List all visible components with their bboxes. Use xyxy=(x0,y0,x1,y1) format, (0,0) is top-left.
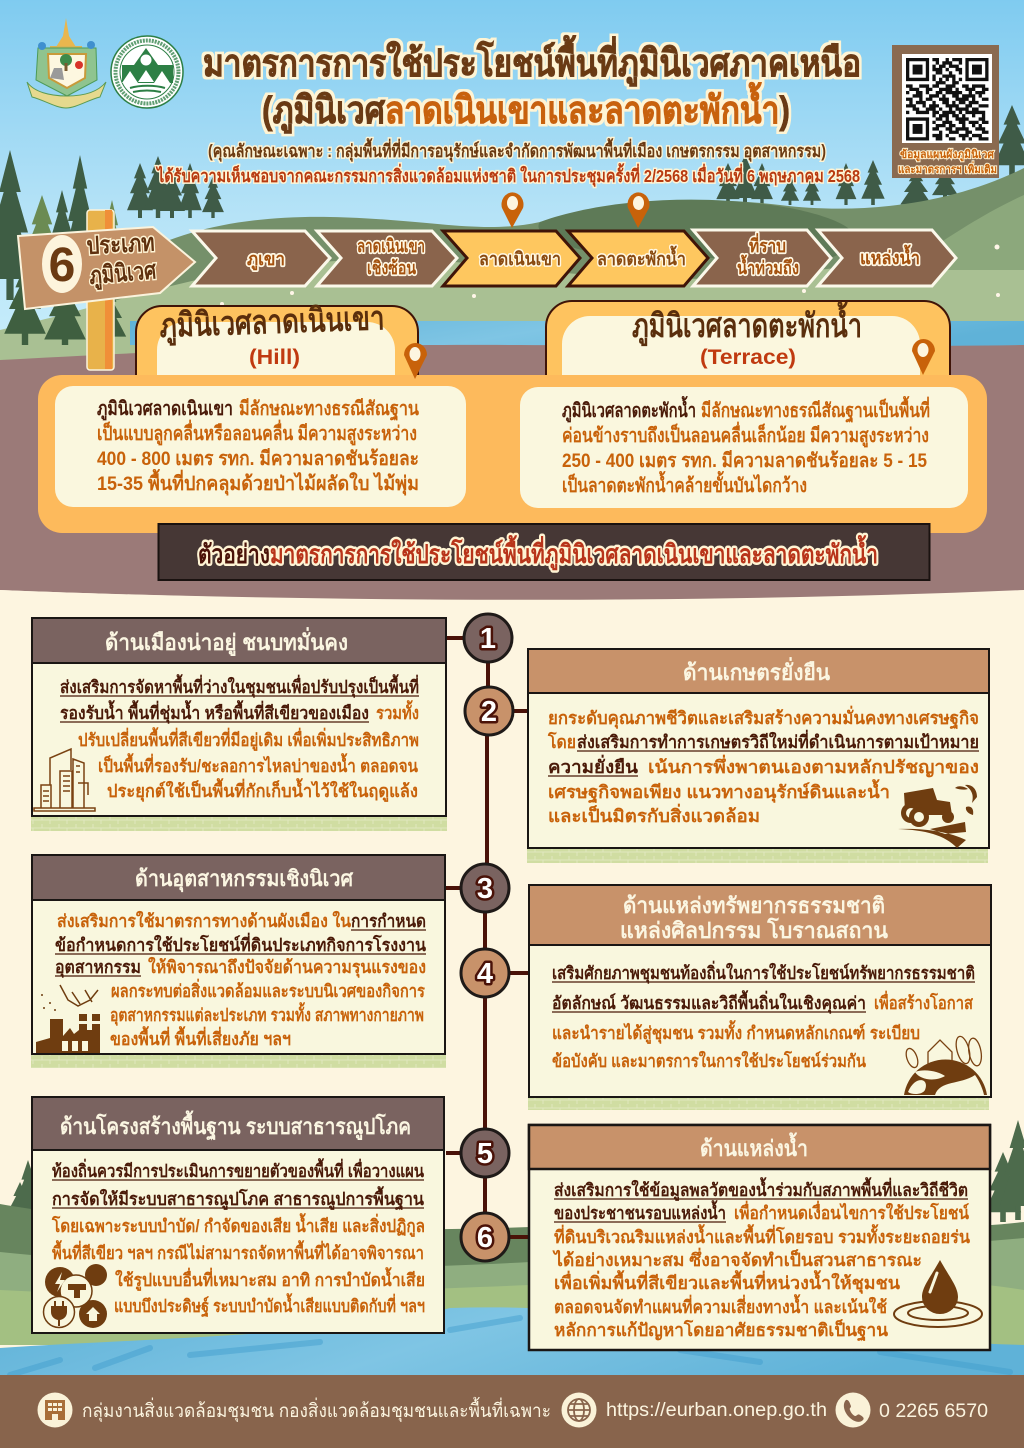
sign text xyxy=(86,229,158,291)
background: mauve band xyxy=(0,345,1024,602)
card: hill description: เป็นแบบลูกคลื่นหรือลอนคลื่น มีความสูงระหว่าง xyxy=(97,419,417,447)
logo: provincial seal xyxy=(27,18,106,108)
body text 6: หลักการแก้ปัญหาโดยอาศัยธรรมชาติเป็นฐาน xyxy=(554,1318,888,1342)
number 1 xyxy=(464,614,512,662)
number 6: 6 xyxy=(477,1222,493,1254)
logo: green round emblem xyxy=(111,36,183,108)
chevron: hill slope highlighted xyxy=(443,231,580,286)
title xyxy=(203,35,861,134)
body text 5: พื้นที่สีเขียว ฯลฯ กรณีไม่สามารถจัดหาพื้นที่ได้อาจพิจารณา xyxy=(52,1240,424,1263)
icon: tractor xyxy=(898,785,977,848)
panel 5: infrastructure and utilities xyxy=(32,1097,444,1333)
icon: building xyxy=(38,1392,72,1428)
body text 6: เพื่อกำหนดเงื่อนไขการใช้ประโยชน์ xyxy=(734,1200,969,1223)
banner: examples heading xyxy=(158,524,930,580)
chevron: flood plain: ที่ราบ xyxy=(749,233,786,256)
body text 4 xyxy=(552,960,975,1071)
timeline spine xyxy=(446,638,528,1237)
background: cream section xyxy=(0,590,1024,1380)
body text 5: โดยเฉพาะระบบบำบัด/ กำจัดของเสีย น้ำเสีย และสิ่งปฏิกูล xyxy=(51,1213,425,1238)
background: sky and upper landscape xyxy=(0,0,1024,362)
body text 3: อุตสาหกรรมแต่ละประเภท รวมทั้ง สภาพทางกายภาพ xyxy=(110,1002,424,1026)
label: Hill: (Hill) xyxy=(249,346,300,369)
body text 3: ส่งเสริมการใช้มาตรการทางด้านผังเมือง ใน xyxy=(57,910,351,931)
number 1: 1 xyxy=(480,623,496,655)
sign number: 6 xyxy=(49,239,75,292)
number 2: 2 xyxy=(481,696,497,728)
header 6: ด้านแหล่งน้ำ xyxy=(700,1132,808,1161)
body text 1: ปรับเปลี่ยนพื้นที่สีเขียวที่มีอยู่เดิม เพื่อเพิ่มประสิทธิภาพ xyxy=(78,727,419,752)
QR code xyxy=(906,60,988,139)
subtitle: characteristics: (คุณลักษณะเฉพาะ : กลุ่มพื้นที่ที่มีการอนุรักษ์และจำกัดการพัฒนาพื้นที่เมือง เกษตรกรรม อุตสาหกรรม) xyxy=(208,138,826,162)
header 5: ด้านโครงสร้างพื้นฐาน ระบบสาธารณูปโภค xyxy=(60,1110,411,1141)
body text 4: เพื่อสร้างโอกาส xyxy=(874,990,973,1013)
panel 1: livable city xyxy=(31,618,447,831)
number 5 xyxy=(461,1129,509,1177)
panel 4: natural and cultural resources xyxy=(528,885,991,1110)
QR panel xyxy=(892,45,999,178)
chevron: terrace highlighted xyxy=(568,231,708,286)
background: lower landscape and water xyxy=(0,1120,1024,1376)
icon: phone xyxy=(836,1392,870,1428)
heading: hill: ภูมินิเวศลาดเนินเขา xyxy=(159,299,385,347)
pin marker: terrace xyxy=(628,192,650,228)
header 4 xyxy=(620,893,888,943)
body text 5: ท้องถิ่นควรมีการประเมินการขยายตัวของพื้นที่ เพื่อวางแผน xyxy=(52,1158,424,1181)
card: terrace description xyxy=(520,387,968,508)
chevron: complex hill slope xyxy=(317,231,457,286)
body text 2: ยกระดับคุณภาพชีวิตและเสริมสร้างความมั่นคงทางเศรษฐกิจ xyxy=(548,705,979,730)
card: terrace description: มีลักษณะทางธรณีสัณฐานเป็นพื้นที่ xyxy=(701,395,930,424)
number 3: 3 xyxy=(477,873,493,905)
card: hill description xyxy=(55,386,466,507)
body text 2: ส่งเสริมการทำการเกษตรวิถีใหม่ที่ดำเนินการตามเป้าหมาย xyxy=(577,729,979,752)
body text 5: ใช้รูปแบบอื่นที่เหมาะสม อาทิ การบำบัดน้ำเสีย xyxy=(115,1267,425,1292)
title line 2: (ภูมินิเวศลาดเนินเขาและลาดตะพักน้ำ) xyxy=(262,82,790,134)
card: hill description: 400 - 800 เมตร รทก. มีความลาดชันร้อยละ xyxy=(97,447,419,470)
body text 4: อัตลักษณ์ วัฒนธรรมและวิถีพื้นถิ่นในเชิงคุณค่า xyxy=(552,990,866,1014)
panel 3: ecological industry xyxy=(31,855,446,1068)
body text 2: และเป็นมิตรกับสิ่งแวดล้อม xyxy=(548,803,760,826)
body text 2: เน้นการพึ่งพาตนเองตามหลักปรัชญาของ xyxy=(648,754,979,778)
card: terrace description: 250 - 400 เมตร รทก. มีความลาดชันร้อยละ 5 - 15 xyxy=(562,449,927,472)
body text 5: แบบบึงประดิษฐ์ ระบบบำบัดน้ำเสียแบบติดกับที่ ฯลฯ xyxy=(114,1293,425,1318)
number 5: 5 xyxy=(477,1138,493,1170)
chevron: complex hill slope: เชิงซ้อน xyxy=(367,258,417,278)
QR caption xyxy=(898,148,997,176)
pin marker: hill panel xyxy=(404,343,427,379)
chevron: water source: แหล่งน้ำ xyxy=(860,244,920,268)
body text 2: เศรษฐกิจพอเพียง แนวทางอนุรักษ์ดินและน้ำ xyxy=(548,779,890,804)
footer: website: https://eurban.onep.go.th xyxy=(606,1400,827,1421)
chevron: mountain: ภูเขา xyxy=(247,249,285,271)
body text 3: การกำหนด xyxy=(351,911,426,931)
chevron: mountain xyxy=(192,231,330,286)
body text 1: รองรับน้ำ พื้นที่ชุ่มน้ำ หรือพื้นที่สีเขียวของเมือง xyxy=(60,700,369,724)
number 6 xyxy=(461,1213,509,1261)
wooden post xyxy=(87,210,114,370)
QR caption: และมาตรการฯ เพิ่มเติม xyxy=(898,161,997,176)
card: hill description: 15-35 พื้นที่ปกคลุมด้วยป่าไม้ผลัดใบ ไม้พุ่ม xyxy=(97,468,419,496)
body text 6: ของประชาชนรอบแหล่งน้ำ xyxy=(554,1200,726,1223)
body text 4: ข้อบังคับ และมาตรการในการใช้ประโยชน์ร่วมกัน xyxy=(552,1050,866,1071)
subtitle: approval: ได้รับความเห็นชอบจากคณะกรรมการสิ่งแวดล้อมแห่งชาติ ในการประชุมครั้งที่ 2/2568 เมื่อวันที่ 6 พฤษภาคม 2568 xyxy=(155,163,860,187)
panel 2: sustainable agriculture xyxy=(527,649,989,863)
number 3 xyxy=(461,864,509,912)
chevron: water source xyxy=(818,230,956,286)
icon: city buildings xyxy=(34,749,95,811)
icon: earth and community xyxy=(904,1035,987,1095)
header 4: ด้านแหล่งทรัพยากรธรรมชาติ xyxy=(623,893,885,918)
header 4: แหล่งศิลปกรรม โบราณสถาน xyxy=(620,917,888,943)
body text 6: ได้อย่างเหมาะสม ซึ่งอาจจัดทำเป็นสวนสาธารณะ xyxy=(552,1247,922,1270)
chevron: flood plain: น้ำท่วมถึง xyxy=(737,254,799,278)
card: hill description: มีลักษณะทางธรณีสัณฐาน xyxy=(239,397,420,422)
body text 1: เป็นพื้นที่รองรับ/ชะลอการไหลบ่าของน้ำ ตลอดจน xyxy=(98,753,418,776)
body text 2: โดย xyxy=(547,731,576,752)
body text 6 xyxy=(552,1177,970,1342)
footer: phone number: 0 2265 6570 xyxy=(879,1401,988,1422)
chevron: terrace highlighted: ลาดตะพักน้ำ xyxy=(597,245,686,269)
sign number xyxy=(42,235,82,293)
sign text: ภูมินิเวศ xyxy=(88,257,158,291)
body text 1: รวมทั้ง xyxy=(376,700,419,723)
card: terrace description: ภูมินิเวศลาดตะพักน้ำ xyxy=(562,395,696,424)
icon: utilities xyxy=(44,1264,107,1328)
body text 3 xyxy=(55,910,426,1049)
number 4: 4 xyxy=(477,958,493,990)
header 2: ด้านเกษตรยั่งยืน xyxy=(683,656,830,685)
body text 5: การจัดให้มีระบบสาธารณูปโภค สาธารณูปการพื้นฐาน xyxy=(52,1186,424,1211)
body text 5 xyxy=(51,1158,425,1318)
header 3: ด้านอุตสาหกรรมเชิงนิเวศ xyxy=(135,866,354,893)
icon: factory xyxy=(36,985,100,1053)
body text 3: ให้พิจารณาถึงปัจจัยด้านความรุนแรงของ xyxy=(148,956,426,978)
footer: organisation: กลุ่มงานสิ่งแวดล้อมชุมชน กองสิ่งแวดล้อมชุมชนและพื้นที่เฉพาะ xyxy=(82,1397,551,1423)
pin marker: hill xyxy=(502,192,524,228)
card: terrace description: ค่อนข้างราบถึงเป็นลอนคลื่นเล็กน้อย มีความสูงระหว่าง xyxy=(562,421,929,449)
body text 1: ประยุกต์ใช้เป็นพื้นที่กักเก็บน้ำไว้ใช้ในฤดูแล้ง xyxy=(107,778,418,803)
body text 6: เพื่อเพิ่มพื้นที่สีเขียวและพื้นที่หน่วงน้ำให้ชุมชน xyxy=(554,1270,900,1294)
chevron: flood plain xyxy=(693,230,831,286)
label: Terrace: (Terrace) xyxy=(700,346,796,369)
icon: water drop xyxy=(894,1260,982,1327)
sign text: ประเภท xyxy=(86,229,155,260)
body text 1 xyxy=(60,674,419,803)
banner: examples heading: ตัวอย่างมาตรการการใช้ประโยชน์พื้นที่ภูมินิเวศลาดเนินเขาและลาดตะพักน้ำ xyxy=(198,534,878,571)
card: hill description: ภูมินิเวศลาดเนินเขา xyxy=(97,398,233,422)
body text 3: ข้อกำหนดการใช้ประโยชน์ที่ดินประเภทกิจการโรงงาน xyxy=(55,932,426,955)
panel: hill tab xyxy=(136,299,418,378)
card: terrace description: เป็นลาดตะพักน้ำคล้ายขั้นบันไดกว้าง xyxy=(562,470,807,497)
number 2 xyxy=(465,687,513,735)
body text 2 xyxy=(547,705,979,826)
sign: 6 types xyxy=(18,227,195,309)
number 4 xyxy=(461,949,509,997)
heading: terrace: ภูมินิเวศลาดตะพักน้ำ xyxy=(632,301,862,347)
panel: description container xyxy=(38,375,987,533)
QR caption: ข้อมูลแผนผังภูมินิเวศ xyxy=(900,148,995,162)
body text 3: ผลกระทบต่อสิ่งแวดล้อมและระบบนิเวศของกิจการ xyxy=(111,978,425,1001)
body text 4: และนำรายได้สู่ชุมชน รวมทั้ง กำหนดหลักเกณฑ์ ระเบียบ xyxy=(552,1020,920,1045)
body text 1: ส่งเสริมการจัดหาพื้นที่ว่างในชุมชนเพื่อปรับปรุงเป็นพื้นที่ xyxy=(60,674,419,698)
panel: terrace tab xyxy=(546,301,950,378)
body text 6: ที่ดินบริเวณริมแหล่งน้ำและพื้นที่โดยรอบ รวมทั้งระยะถอยร่น xyxy=(554,1224,970,1247)
pin marker: terrace panel xyxy=(912,339,935,375)
body text 3: ของพื้นที่ พื้นที่เสี่ยงภัย ฯลฯ xyxy=(110,1026,291,1049)
body text 6: ตลอดจนจัดทำแผนที่ความเสี่ยงทางน้ำ และเน้นใช้ xyxy=(554,1294,887,1317)
footer bar xyxy=(0,1375,1024,1448)
body text 3: อุตสาหกรรม xyxy=(55,957,141,978)
body text 2: ความยั่งยืน xyxy=(548,754,638,777)
title line 1: มาตรการการใช้ประโยชน์พื้นที่ภูมินิเวศภาคเหนือ xyxy=(203,35,861,87)
chevron: hill slope highlighted: ลาดเนินเขา xyxy=(479,249,561,269)
panel 6: water source xyxy=(529,1125,990,1350)
header 1: ด้านเมืองน่าอยู่ ชนบทมั่นคง xyxy=(105,626,348,657)
body text 6: ส่งเสริมการใช้ข้อมูลพลวัตของน้ำร่วมกับสภาพพื้นที่และวิถีชีวิต xyxy=(554,1177,968,1202)
chevron: complex hill slope: ลาดเนินเขา xyxy=(357,236,425,256)
icon: globe xyxy=(562,1392,596,1428)
